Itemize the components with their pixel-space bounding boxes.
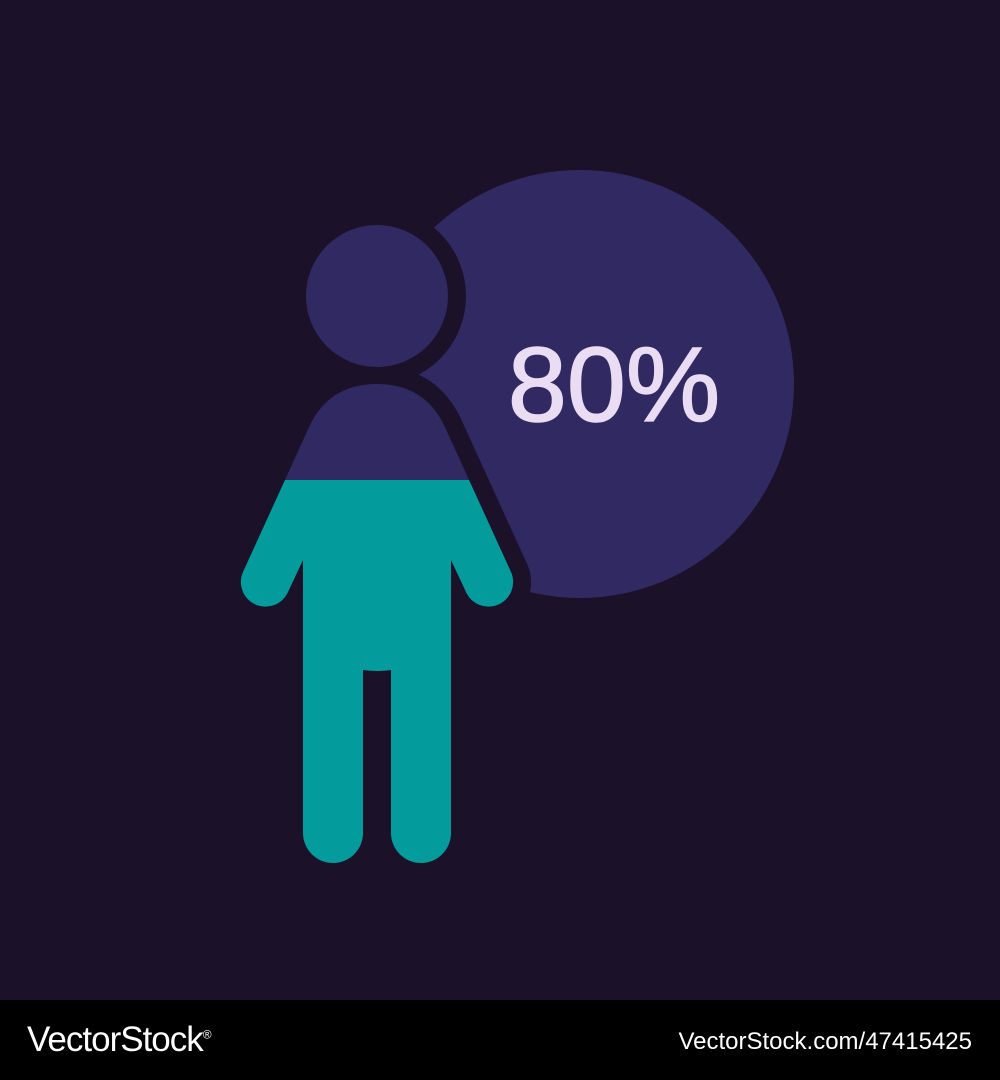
percentage label: 80% — [508, 326, 720, 444]
infographic chart — [240, 170, 794, 863]
pie circle — [366, 170, 794, 598]
url text: VectorStock.com/47415425 — [678, 1028, 972, 1055]
person icon — [241, 225, 513, 863]
person gap outline — [241, 225, 513, 863]
footer watermark bar — [0, 1000, 1000, 1080]
brand text: VectorStock® — [27, 1020, 211, 1059]
